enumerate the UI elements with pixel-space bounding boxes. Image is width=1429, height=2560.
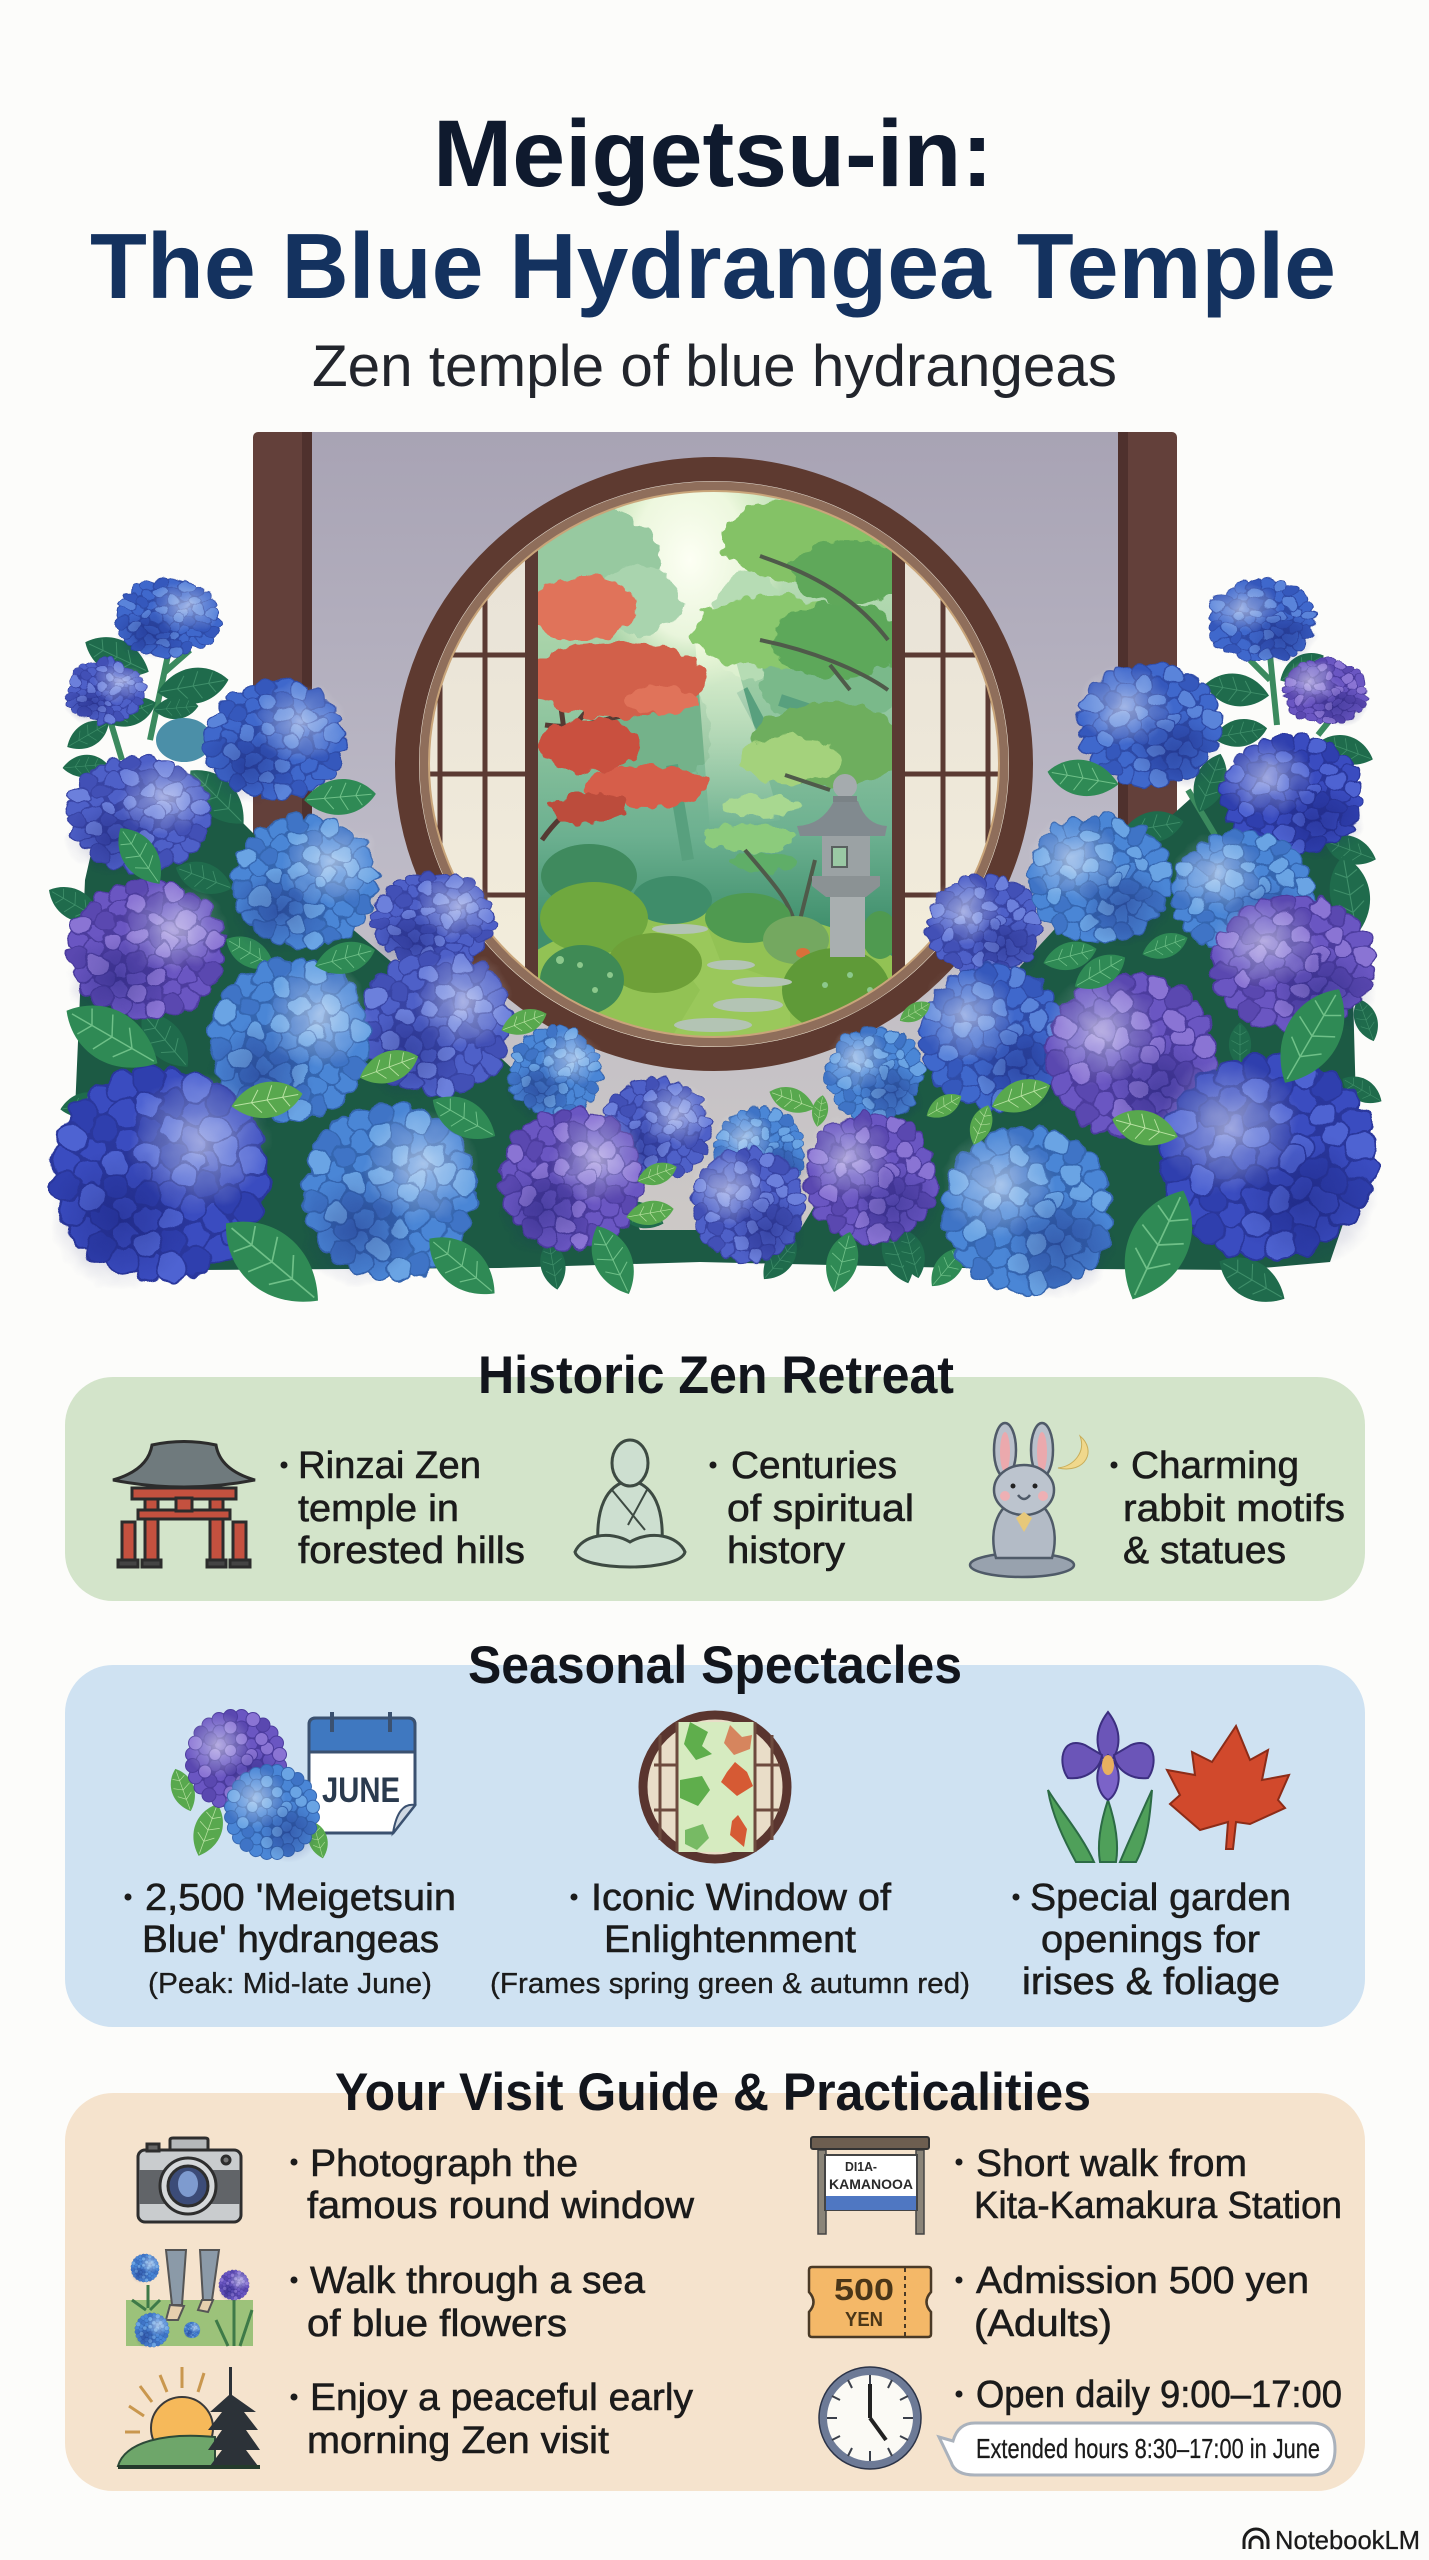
front leaves — [54, 754, 1362, 1323]
stone lantern — [797, 774, 887, 957]
wall — [300, 432, 1130, 1240]
bushes — [540, 844, 898, 1032]
icon: round window with leaves — [643, 1715, 787, 1859]
icon: 500 yen ticket — [809, 2267, 931, 2337]
text: Open daily: Open daily 9:00–17:00 — [976, 2374, 1342, 2416]
icon: camera — [138, 2138, 241, 2222]
text: Iconic Window: (Frames spring green & autumn red) — [490, 1968, 970, 2000]
text: Rinzai Zen: Rinzai Zen — [298, 1445, 481, 1487]
text: 2,500 hydrangeas: Blue' hydrangeas — [142, 1919, 439, 1961]
back leaves — [42, 627, 1387, 1315]
icon: station sign: DI1A- — [845, 2159, 877, 2174]
icon: 500 yen ticket: 500 — [834, 2272, 894, 2307]
right green tree — [692, 496, 910, 925]
text: Centuries: of spiritual — [727, 1488, 914, 1530]
distant trees — [538, 509, 892, 774]
ground — [538, 912, 892, 1036]
text: Charming: rabbit motifs — [1123, 1488, 1345, 1530]
text: Photograph: Photograph the — [310, 2143, 578, 2185]
text: Enjoy — [290, 2377, 693, 2462]
text: 2,500 hydrangeas: 2,500 'Meigetsuin — [145, 1877, 456, 1919]
text: Centuries: Centuries — [731, 1445, 897, 1487]
icon: rabbit statue with moon — [970, 1423, 1088, 1577]
icon: calendar June — [309, 1712, 415, 1833]
subtitle: Zen temple of blue hydrangeas — [312, 334, 1117, 399]
shoji lattice — [430, 600, 998, 900]
text: Short walk: Short walk from — [976, 2143, 1247, 2185]
icon: clock — [819, 2367, 921, 2469]
text: Charming: Charming — [1131, 1445, 1299, 1487]
inner window posts — [525, 550, 905, 978]
text: Rinzai Zen — [280, 1445, 525, 1572]
text: 2,500 hydrangeas: (Peak: Mid-late June) — [148, 1968, 432, 2000]
text: Rinzai Zen: temple in — [298, 1488, 459, 1530]
text: Special garden: irises & foliage — [1022, 1961, 1280, 2003]
icon: sunrise and pagoda — [118, 2367, 260, 2469]
text: Charming — [1110, 1445, 1345, 1572]
stepping stones — [652, 924, 792, 1032]
heading: Seasonal Spectacles — [468, 1636, 962, 1695]
text: Walk: Walk through a sea — [310, 2260, 646, 2302]
distant trunks and light rays — [666, 644, 810, 860]
text: Admission: Admission 500 yen — [976, 2260, 1309, 2302]
panel: Historic Zen Retreat — [65, 1346, 1365, 1601]
title — [90, 101, 1336, 318]
text: Special garden: Special garden — [1030, 1877, 1291, 1919]
hero illustration: temple wall and round window — [42, 430, 1387, 1323]
NotebookLM watermark: NotebookLM — [1275, 2525, 1420, 2555]
text: Enjoy: morning Zen visit — [307, 2420, 609, 2462]
title: Meigetsu-in: — [433, 101, 993, 207]
text: 2,500 hydrangeas — [124, 1877, 456, 2000]
stems — [110, 650, 1330, 835]
panel: Your Visit Guide & Practicalities — [65, 2063, 1365, 2491]
hydrangeas: left side — [50, 579, 712, 1290]
text: Enjoy: Enjoy a peaceful early — [310, 2377, 693, 2419]
icon: iris — [1048, 1712, 1154, 1862]
hydrangea foliage mass — [72, 760, 1358, 1270]
icon: torii gate — [113, 1442, 255, 1567]
text: Centuries — [710, 1445, 914, 1572]
text: Photograph: famous round window — [307, 2185, 695, 2227]
text: Special garden — [1012, 1877, 1291, 2003]
text: Walk: of blue flowers — [307, 2303, 567, 2345]
text: Iconic Window — [490, 1877, 970, 2000]
icon: station sign — [811, 2137, 929, 2234]
round window — [400, 430, 1030, 1120]
text: Rinzai Zen: forested hills — [298, 1530, 525, 1572]
text: Centuries: history — [727, 1530, 845, 1572]
callout: extended hours: Extended hours 8:30–17:00 in June — [976, 2433, 1320, 2464]
wooden pillars — [253, 432, 1177, 852]
panel: Seasonal Spectacles — [65, 1636, 1365, 2027]
text: Iconic Window: Iconic Window of — [591, 1877, 891, 1919]
icon: 500 yen ticket: YEN — [845, 2309, 883, 2331]
icon: walking through flowers — [126, 2250, 253, 2348]
callout: extended hours — [939, 2423, 1335, 2475]
title: The Blue Hydrangea Temple — [90, 214, 1336, 318]
icon: calendar June: JUNE — [322, 1771, 400, 1810]
text: Admission — [956, 2260, 1309, 2345]
text: Walk — [290, 2260, 646, 2345]
heading: Your Visit Guide & Practicalities — [335, 2063, 1091, 2122]
icon: station sign: KAMANOOA — [829, 2176, 913, 2192]
text: Charming: & statues — [1123, 1530, 1286, 1572]
heading: Historic Zen Retreat — [478, 1346, 954, 1405]
teal partial bloom behind stems — [156, 718, 212, 762]
hydrangeas: right side — [690, 579, 1378, 1300]
icon: red maple leaf — [1167, 1726, 1289, 1849]
icon: hydrangea blooms — [165, 1710, 332, 1863]
garden scene — [538, 492, 892, 1036]
text: Iconic Window: Enlightenment — [604, 1919, 856, 1961]
text: Admission: (Adults) — [974, 2303, 1112, 2345]
text: Short walk: Kita-Kamakura Station — [974, 2185, 1342, 2227]
icon: meditating figure — [575, 1440, 685, 1567]
text: Special garden: openings for — [1041, 1919, 1260, 1961]
red maple — [529, 576, 706, 840]
text: Photograph — [290, 2143, 695, 2227]
text: Short walk — [956, 2143, 1342, 2227]
hydrangeas — [50, 579, 1378, 1300]
